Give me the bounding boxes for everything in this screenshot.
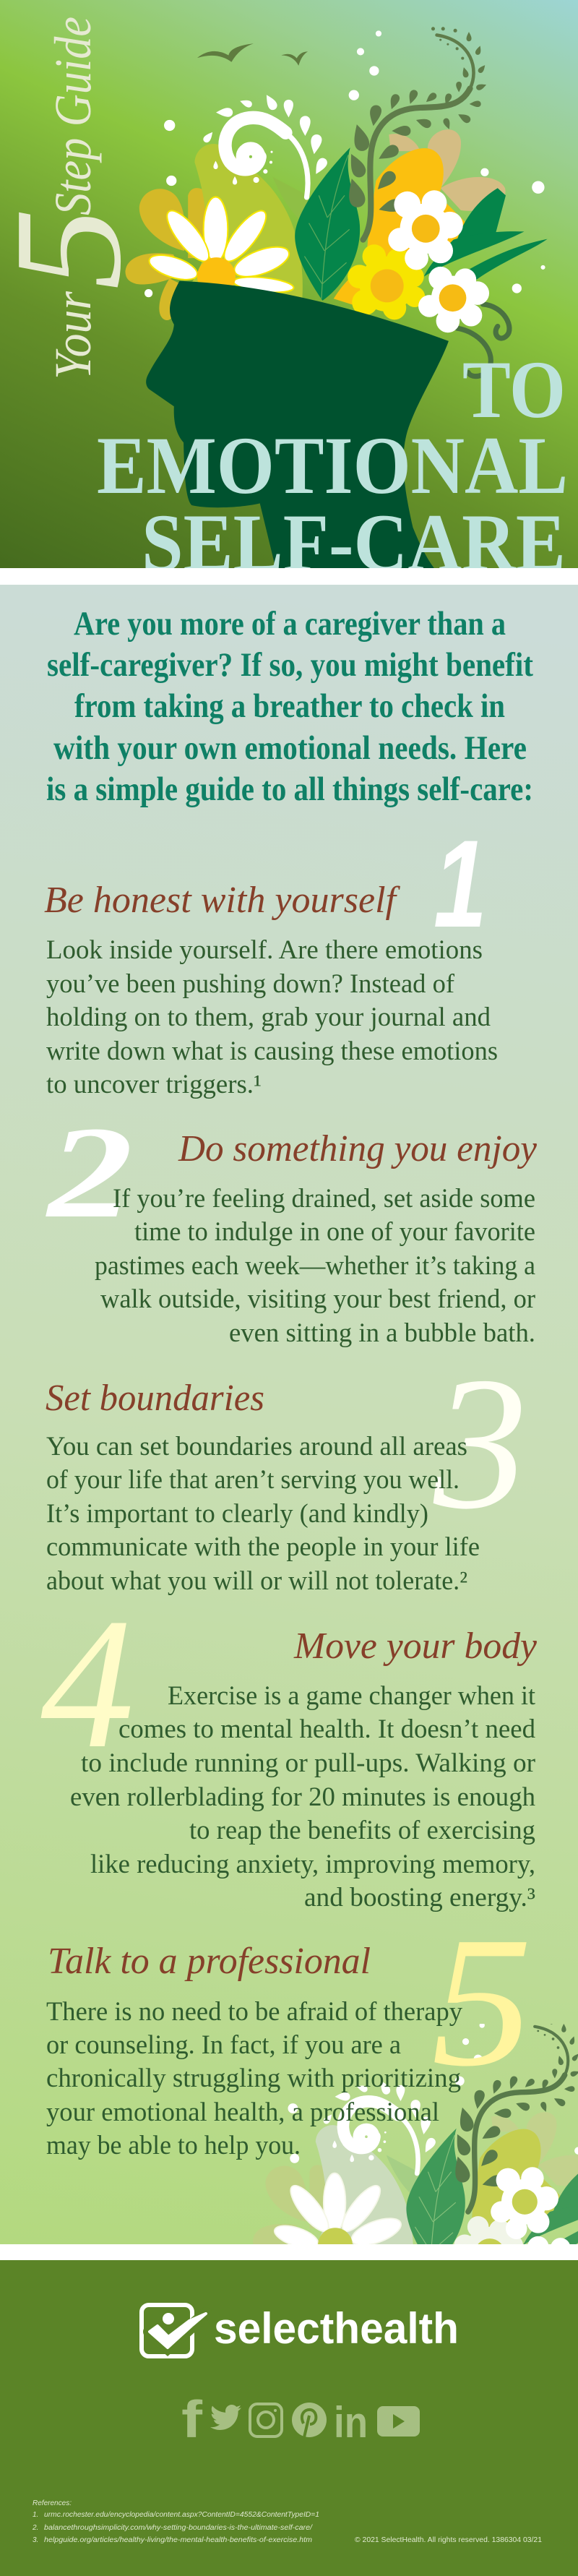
step 5 text: may be able to help you. — [46, 2131, 301, 2160]
references: 1. — [33, 2511, 38, 2519]
white flower upper — [388, 190, 463, 270]
olive shape — [184, 144, 303, 299]
icon: pinterest — [292, 2403, 327, 2437]
step 5 number: 5 — [431, 1898, 532, 2105]
step 2 text: time to indulge in one of your favorite — [134, 1217, 535, 1247]
step 1 text: you’ve been pushing down? Instead of — [46, 969, 455, 999]
step 3 heading: Set boundaries — [46, 1378, 264, 1419]
white flower lower — [418, 267, 489, 332]
intro paragraph: with your own emotional needs. Here — [53, 729, 527, 767]
step 4 text — [70, 1681, 536, 1912]
references: balancethroughsimplicity.com/why-setting-boundaries-is-the-ultimate-self-care/ — [44, 2524, 313, 2532]
footer panel — [0, 2260, 578, 2576]
icon: linkedin: in — [334, 2398, 368, 2447]
step 4 number: 4 — [40, 1580, 134, 1787]
step 2 text: walk outside, visiting your best friend, or — [100, 1284, 535, 1314]
head silhouette — [146, 281, 449, 572]
references: helpguide.org/articles/healthy-living/the-mental-health-benefits-of-exercise.htm — [44, 2536, 312, 2544]
step 5 text — [46, 1997, 462, 2160]
intro paragraph: Are you more of a caregiver than a — [74, 605, 506, 643]
step 2 text: pastimes each week—whether it’s taking a — [95, 1251, 535, 1281]
large green leaf — [295, 147, 360, 301]
step 4 text: like reducing anxiety, improving memory, — [90, 1850, 535, 1879]
step 4 heading: Move your body — [293, 1626, 538, 1667]
step 2 text: even sitting in a bubble bath. — [229, 1318, 535, 1348]
panel: steps background — [0, 585, 578, 2244]
step 3 text: about what you will or will not tolerate.² — [46, 1566, 467, 1596]
social icons — [181, 2391, 420, 2449]
step 4 text: comes to mental health. It doesn’t need — [118, 1714, 535, 1744]
step 1 number: 1 — [434, 815, 487, 953]
icon: twitter — [210, 2405, 241, 2430]
step 1 text — [46, 935, 498, 1099]
logo wordmark: selecthealth — [214, 2304, 459, 2353]
step 3 text: of your life that aren’t serving you well. — [46, 1465, 460, 1495]
icon: youtube — [377, 2406, 420, 2437]
vertical title: your 5 step guide: Your — [44, 291, 102, 379]
step 2 text — [95, 1184, 535, 1348]
references: 2. — [32, 2524, 38, 2532]
icon: instagram — [250, 2404, 282, 2437]
step 2 heading: Do something you enjoy — [178, 1128, 538, 1169]
references: 3. — [33, 2536, 38, 2544]
step 4 text: to reap the benefits of exercising — [189, 1816, 535, 1845]
grass leaves — [424, 188, 548, 280]
step 3 text: You can set boundaries around all areas — [46, 1432, 467, 1461]
step 1 text: to uncover triggers.¹ — [46, 1070, 262, 1099]
icon: selecthealth check mark — [142, 2305, 206, 2356]
small background leaf — [387, 2155, 418, 2193]
step 5 text: or counseling. In fact, if you are a — [46, 2030, 401, 2060]
intro paragraph — [46, 605, 533, 808]
daisy — [147, 197, 294, 296]
references: urmc.rochester.edu/encyclopedia/content.aspx?ContentID=4552&ContentTypeID=1 — [44, 2511, 319, 2519]
references: References: — [33, 2499, 72, 2507]
hero gradient background — [0, 0, 578, 568]
step 3 number: 3 — [431, 1338, 527, 1548]
copyright: © 2021 SelectHealth. All rights reserved. 1386304 03/21 — [355, 2536, 542, 2544]
step 4 text: Exercise is a game changer when it — [168, 1681, 536, 1711]
small lower swirls — [457, 304, 509, 377]
white dots — [144, 30, 545, 297]
yellow flower — [348, 244, 425, 319]
step 4 text: and boosting energy.³ — [304, 1883, 535, 1912]
step 3 text: communicate with the people in your life — [46, 1532, 480, 1562]
orange blossom — [334, 148, 479, 310]
icon: facebook: f — [181, 2391, 203, 2449]
tan petals — [389, 129, 506, 211]
step 4 text: even rollerblading for 20 minutes is enough — [70, 1782, 535, 1812]
step 1 text: holding on to them, grab your journal and — [46, 1003, 491, 1032]
step 3 text — [46, 1432, 480, 1596]
step 1 text: write down what is causing these emotions — [46, 1036, 498, 1066]
step 3 text: It’s important to clearly (and kindly) — [46, 1499, 428, 1529]
faded floral illustration — [253, 2024, 578, 2244]
main title — [98, 363, 565, 568]
step 5 text: your emotional health, a professional — [46, 2098, 439, 2127]
step 2 number: 2 — [45, 1100, 133, 1245]
step 5 text: chronically struggling with prioritizing — [46, 2064, 461, 2093]
step 1 text: Look inside yourself. Are there emotions — [46, 935, 483, 965]
curling vine — [345, 27, 487, 240]
step 5 text: There is no need to be afraid of therapy — [46, 1997, 462, 2027]
floral illustration — [125, 27, 548, 377]
white swirl — [225, 118, 308, 197]
birds — [197, 43, 308, 66]
step 2 text: If you’re feeling drained, set aside some — [113, 1184, 535, 1214]
main title: TO — [462, 345, 566, 435]
gold petals — [125, 188, 221, 320]
step 1 heading: Be honest with yourself — [44, 880, 401, 921]
references — [32, 2499, 319, 2544]
step 5 heading: Talk to a professional — [48, 1941, 371, 1982]
white droplets — [202, 93, 329, 184]
step 4 text: to include running or pull-ups. Walking or — [81, 1748, 535, 1778]
intro paragraph: from taking a breather to check in — [74, 687, 505, 725]
hero banner — [0, 0, 578, 588]
vertical title: your 5 step guide — [19, 17, 121, 377]
